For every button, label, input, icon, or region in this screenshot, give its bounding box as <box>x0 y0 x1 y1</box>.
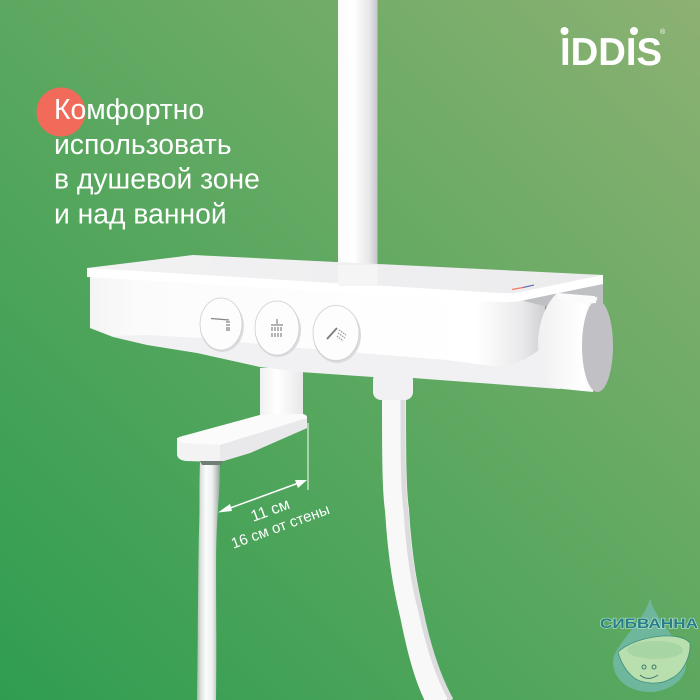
watermark logo: sibvanna <box>600 598 698 692</box>
body front <box>90 276 545 367</box>
heading: comfort statement <box>36 88 268 230</box>
knob clip <box>557 293 596 304</box>
button: overhead shower <box>255 301 301 357</box>
knob end cap <box>582 300 613 392</box>
dimension annotation <box>218 423 332 552</box>
button: hand shower <box>313 306 361 363</box>
bath face <box>640 665 658 678</box>
watermark name: СИБВАННА <box>600 615 698 631</box>
spout side face <box>220 418 307 462</box>
dimension arrow <box>218 480 307 512</box>
vertical shower pipe <box>338 0 378 268</box>
measurement: 11 cm: 11 см <box>249 496 292 526</box>
spout arm <box>177 414 307 462</box>
spout neck <box>260 368 303 430</box>
temperature mark <box>512 285 534 290</box>
thermostat knob barrel <box>538 293 602 392</box>
bath inner <box>627 641 683 659</box>
brand logo: iddis: ® <box>660 28 666 36</box>
pipe base on shelf <box>338 265 378 286</box>
spout <box>177 368 307 465</box>
flexible hose <box>373 372 451 700</box>
extension line <box>307 423 309 490</box>
icon: spout <box>211 318 230 330</box>
spout top face <box>178 414 307 445</box>
red accent circle <box>36 88 86 136</box>
shelf underside right <box>520 280 603 310</box>
icon: hand shower spray <box>337 330 346 341</box>
hose connector nut <box>373 372 413 400</box>
shower thermostat unit <box>87 255 613 392</box>
button: spout <box>200 298 244 352</box>
drop <box>613 598 686 692</box>
brand logo: iddis: IDDIS <box>560 31 662 74</box>
shelf top face <box>87 255 603 293</box>
shelf edge <box>87 268 603 302</box>
icon: hand shower <box>327 328 337 339</box>
heading text: использовать <box>54 128 232 160</box>
water stream <box>197 462 220 700</box>
bath tub <box>618 636 690 683</box>
measurement: 16 cm from wall: 16 см от стены <box>229 501 332 552</box>
lower chamfer <box>90 320 560 389</box>
spout aerator <box>200 461 223 465</box>
heading text: Комфортно <box>54 93 204 125</box>
heading text: в душевой зоне <box>54 162 260 194</box>
hose tube <box>394 395 440 700</box>
hose shading <box>403 395 451 700</box>
heading text: и над ванной <box>54 198 227 230</box>
icon: overhead shower <box>271 319 283 337</box>
